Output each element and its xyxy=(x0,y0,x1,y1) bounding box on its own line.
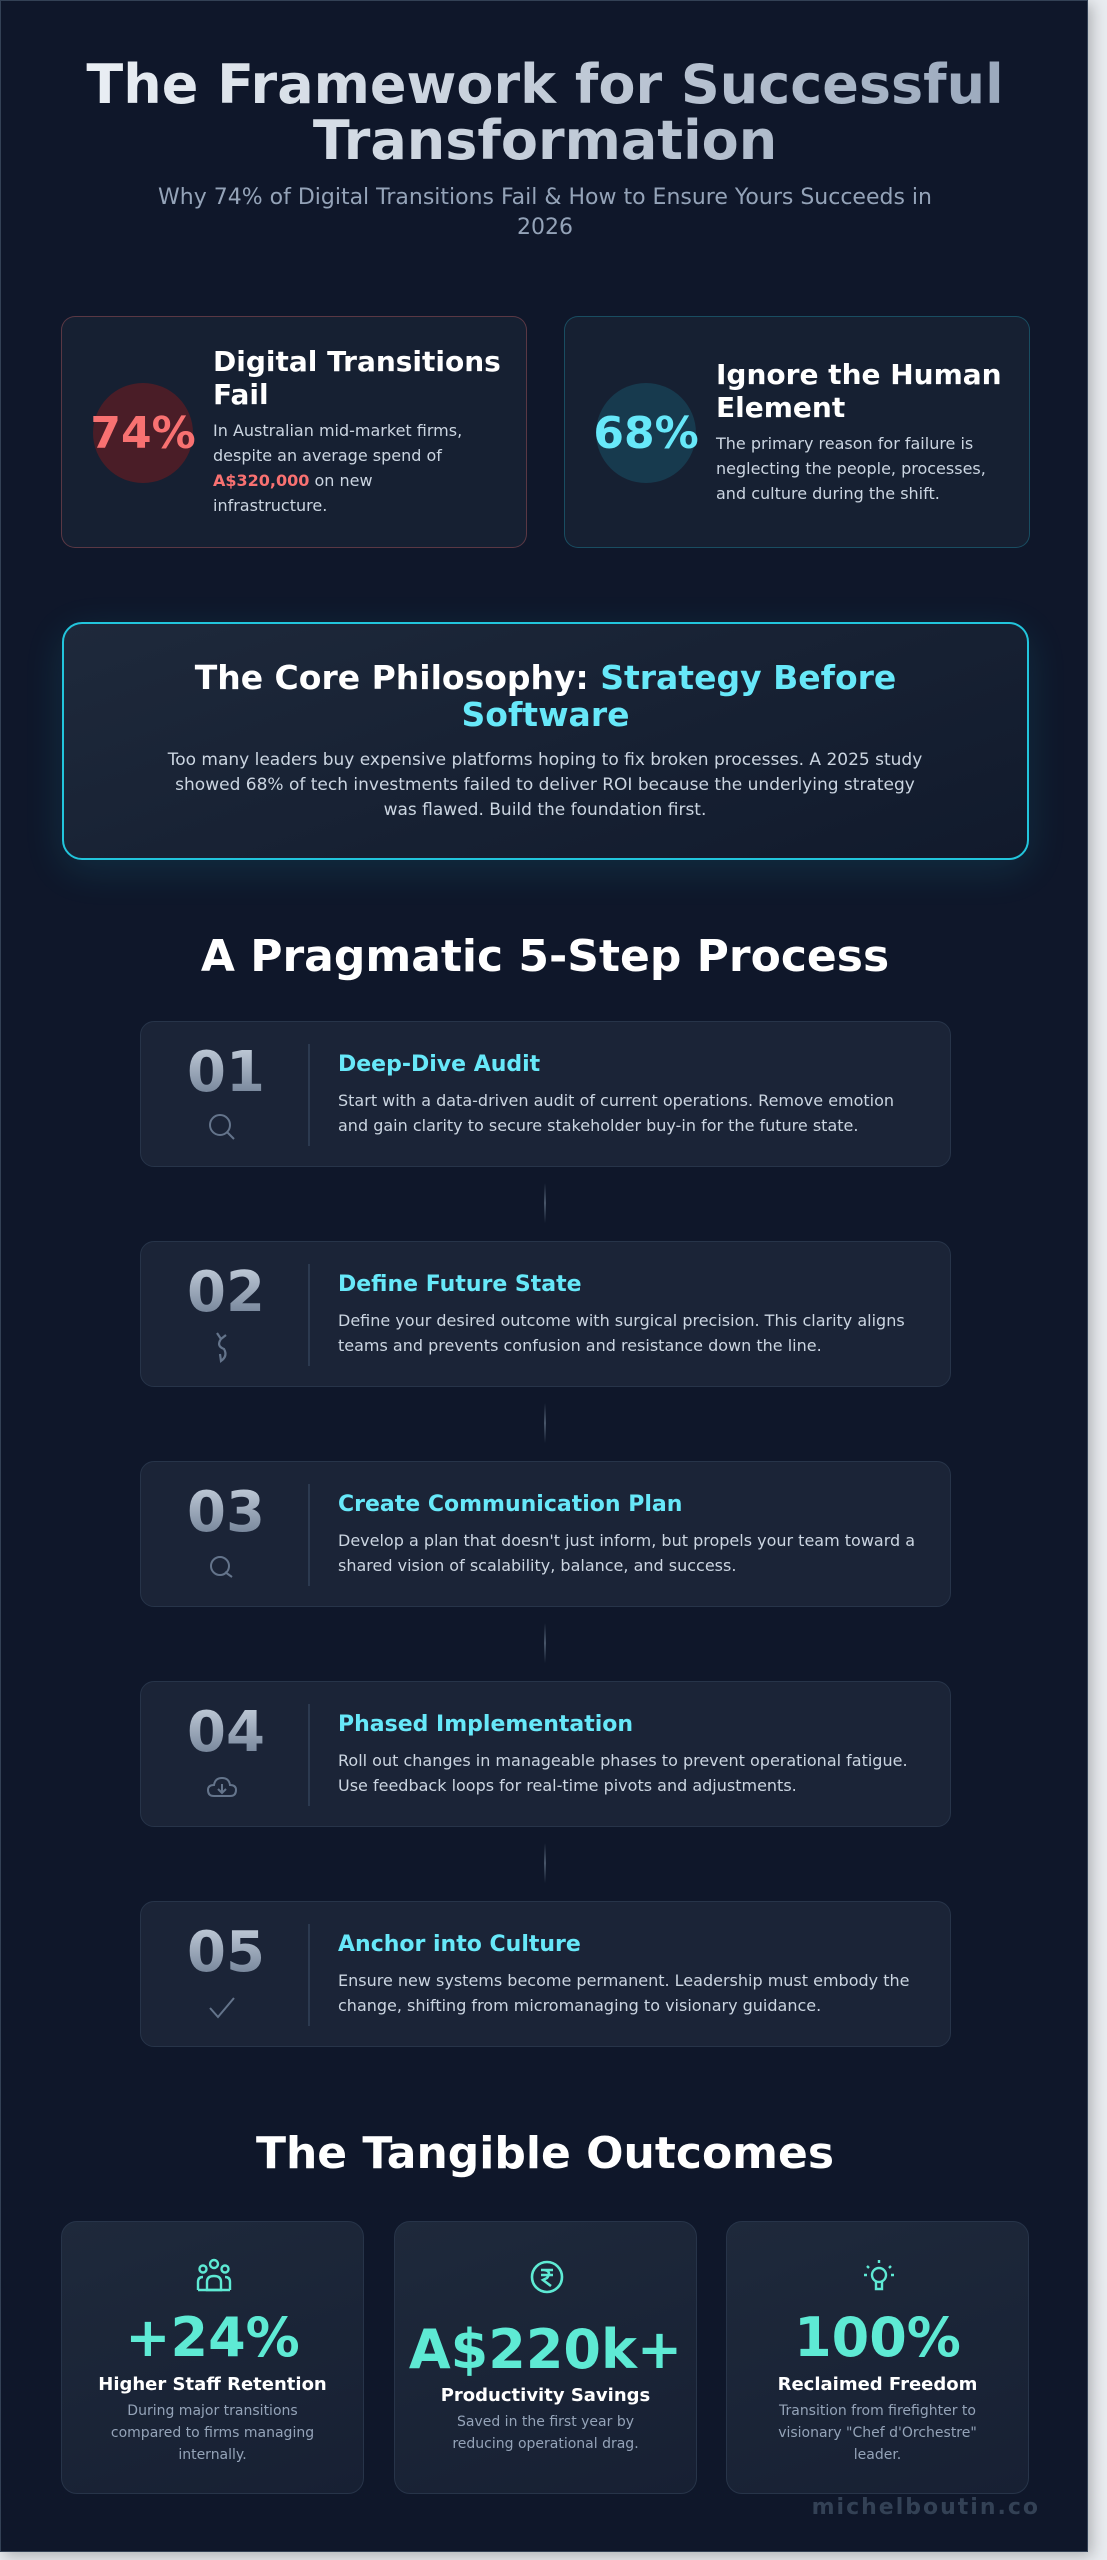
icon: magnifier xyxy=(209,1114,235,1140)
stat text: The primary reason for failure is neglecting the people, processes, and culture during the shift. xyxy=(716,434,986,503)
step 4 xyxy=(140,1681,951,1827)
icon: 74% circle xyxy=(93,383,193,483)
subtitle: Why 74% of Digital Transitions Fail & How to Ensure Yours Succeeds in 2026 xyxy=(158,185,932,240)
icon: currency coin xyxy=(530,2260,564,2294)
title: Transformation xyxy=(313,109,777,172)
heading: outcomes: The Tangible Outcomes xyxy=(256,2128,834,2179)
title: The Framework for Successful xyxy=(86,53,1004,116)
stat heading: Digital Transitions Fail xyxy=(213,345,501,411)
outcome card 1: During major transitions compared to firms managing internally. xyxy=(111,2403,314,2463)
step 2 xyxy=(140,1241,951,1387)
step 1 xyxy=(140,1021,951,1167)
step title: Create Communication Plan xyxy=(338,1492,682,1517)
outcome card 2 xyxy=(394,2221,697,2494)
stat text: In Australian mid-market firms, despite an average spend of A$320,000 on new infrastructure. xyxy=(213,421,462,515)
arrow: connector xyxy=(544,1183,546,1223)
outcome card 3 xyxy=(726,2221,1029,2494)
icon: lightbulb xyxy=(864,2260,894,2290)
icon: cloud download xyxy=(207,1777,237,1797)
heading: process: A Pragmatic 5-Step Process xyxy=(201,931,889,982)
step text: Roll out changes in manageable phases to prevent operational fatigue. Use feedback loops for real-time pivots and adjustments. xyxy=(338,1751,908,1795)
step title: Anchor into Culture xyxy=(338,1932,581,1957)
icon: check xyxy=(209,1998,235,2018)
outcome card 3: Reclaimed Freedom xyxy=(778,2374,977,2395)
arrow: connector xyxy=(544,1623,546,1663)
outcome card 2: Saved in the first year by reducing operational drag. xyxy=(452,2414,639,2452)
philosophy text: Too many leaders buy expensive platforms hoping to fix broken processes. A 2025 study showed 68% of tech investments failed to deliver ROI because the underlying strategy was flawed. Build the foundation first. xyxy=(168,750,922,820)
step title: Deep-Dive Audit xyxy=(338,1052,540,1077)
stat heading: Ignore the Human Element xyxy=(716,358,1002,424)
outcome card 1 xyxy=(61,2221,364,2494)
step 5 xyxy=(140,1901,951,2047)
step title: Phased Implementation xyxy=(338,1712,633,1737)
step 3: 03 xyxy=(187,1480,265,1545)
icon: magnifier xyxy=(210,1556,232,1578)
icon: path xyxy=(216,1332,227,1363)
step text: Start with a data-driven audit of current operations. Remove emotion and gain clarity to secure stakeholder buy-in for the future state. xyxy=(338,1091,894,1135)
step 1: 01 xyxy=(187,1040,265,1105)
step text: Define your desired outcome with surgical precision. This clarity aligns teams and prevents confusion and resistance down the line. xyxy=(338,1311,905,1355)
outcome card 1: +24% xyxy=(125,2306,300,2369)
step 2: 02 xyxy=(187,1260,265,1325)
outcome card 2: A$220k+ xyxy=(409,2318,682,2381)
panel: core philosophy xyxy=(62,622,1029,860)
philosophy heading: The Core Philosophy: Strategy Before Software xyxy=(195,658,896,734)
panel: stat 74% xyxy=(61,316,527,548)
step 3 xyxy=(140,1461,951,1607)
arrow: connector xyxy=(544,1843,546,1883)
title xyxy=(1,57,1089,169)
step text: Develop a plan that doesn't just inform, but propels your team toward a shared vision of scalability, balance, and success. xyxy=(338,1531,915,1575)
panel: stat 68% xyxy=(564,316,1030,548)
outcome card 3: 100% xyxy=(794,2306,961,2369)
icon: people xyxy=(196,2258,232,2292)
outcome card 1: Higher Staff Retention xyxy=(98,2374,327,2395)
step title: Define Future State xyxy=(338,1272,582,1297)
step 5: 05 xyxy=(187,1920,265,1985)
arrow: connector xyxy=(544,1403,546,1443)
outcome card 3: Transition from firefighter to visionary "Chef d'Orchestre" leader. xyxy=(778,2403,977,2463)
icon: 68% circle: 68% xyxy=(593,408,699,458)
step text: Ensure new systems become permanent. Leadership must embody the change, shifting from micromanaging to visionary guidance. xyxy=(338,1971,909,2015)
icon: 74% circle: 74% xyxy=(90,408,196,458)
footer: brand: michelboutin.co xyxy=(812,2495,1040,2520)
outcome card 2: Productivity Savings xyxy=(441,2385,650,2406)
icon: 68% circle xyxy=(596,383,696,483)
step 4: 04 xyxy=(187,1700,265,1765)
